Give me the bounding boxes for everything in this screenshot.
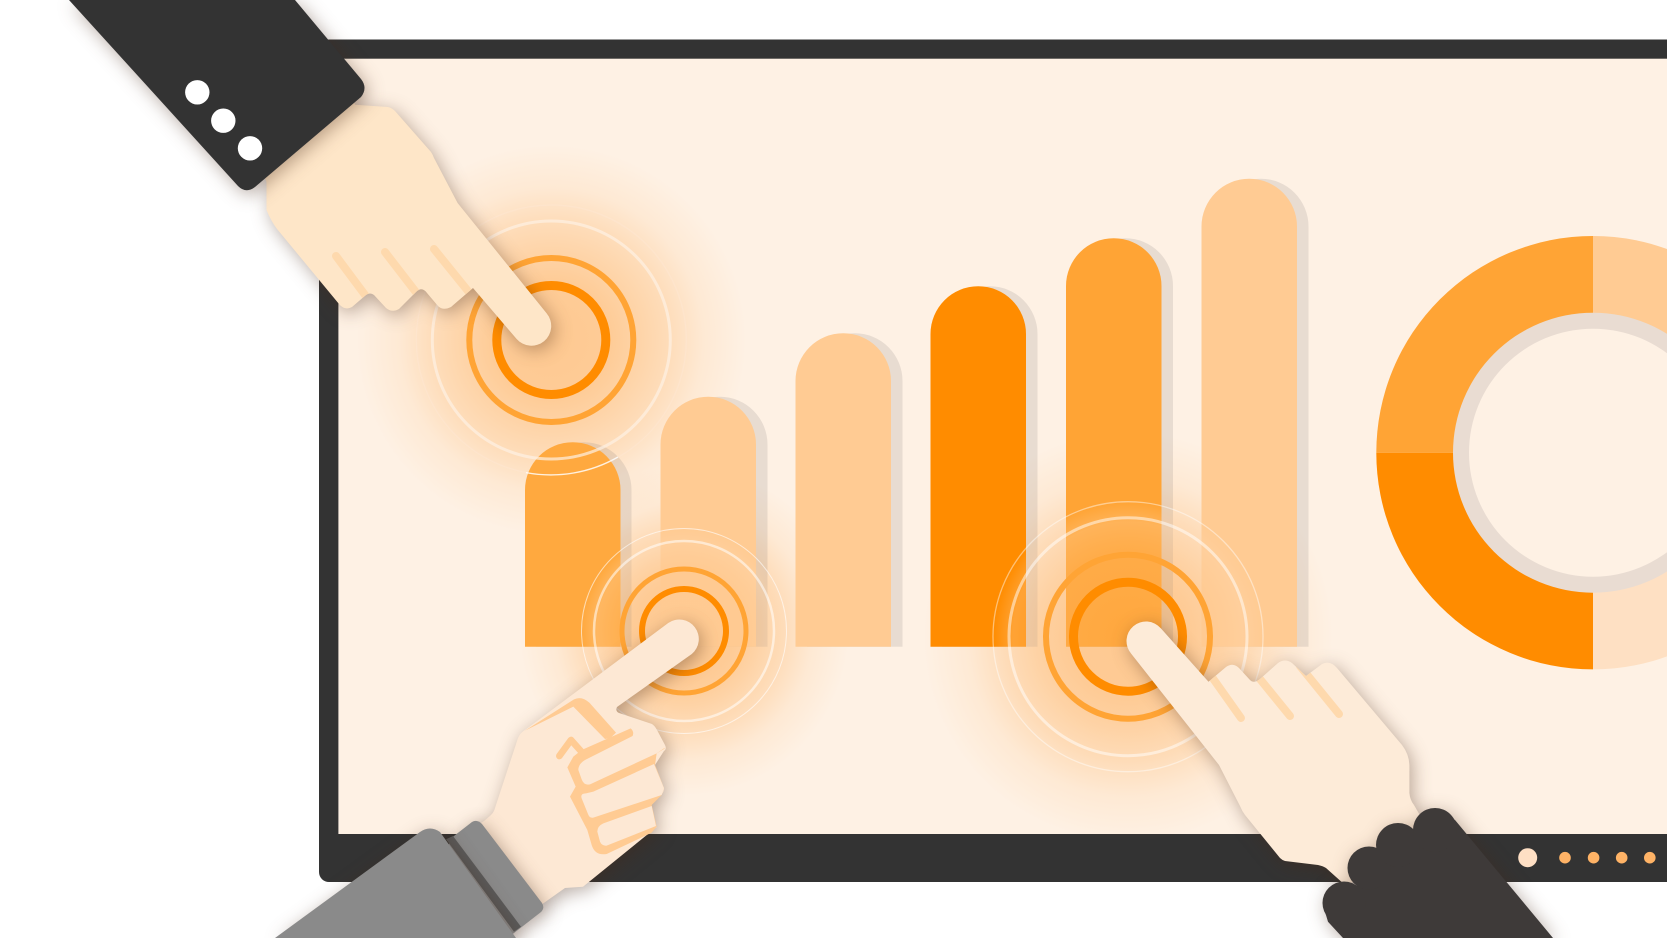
index finger outline [525, 698, 616, 739]
thumb hook [559, 740, 582, 756]
bar 1 [525, 442, 632, 647]
knuckle lines [336, 249, 472, 307]
hand top left [262, 92, 551, 346]
bar 5 [1066, 238, 1173, 647]
cuff [440, 821, 543, 938]
touch ripple top left [416, 205, 686, 475]
hand bottom left [470, 620, 699, 905]
arm [275, 828, 516, 938]
cuff ruffle 4 [1413, 808, 1457, 852]
knuckle lines [1207, 666, 1339, 718]
touch ripple bottom centre [582, 528, 786, 734]
finger outline block [567, 728, 665, 854]
bar 3 [796, 333, 902, 647]
cuff ruffle 2 [1348, 846, 1390, 890]
cuff ruffle 3 [1376, 823, 1420, 867]
touch ripple right [993, 502, 1263, 772]
bar 6 [1202, 179, 1308, 647]
hand shape [262, 92, 551, 346]
touch glows behind chart [356, 145, 1333, 842]
screen frame [319, 40, 1667, 882]
hand right [1126, 621, 1440, 885]
bar 2 [660, 397, 768, 647]
cuff [69, 0, 364, 190]
bar chart [525, 179, 1308, 647]
cuff buttons [185, 80, 262, 160]
sleeve top left [69, 0, 364, 190]
cuff ruffle 1 [1322, 882, 1366, 924]
finger 1 [578, 733, 665, 785]
sleeve bottom left [275, 821, 543, 938]
sleeve right [1322, 808, 1553, 938]
finger 3 [597, 806, 656, 846]
finger 2 [581, 764, 664, 818]
hand shape [1126, 621, 1440, 885]
cuff stripe [446, 836, 521, 932]
cuff body [1323, 808, 1553, 938]
navigation dots [1518, 848, 1656, 867]
hand shape [470, 620, 699, 905]
bar 4 [930, 286, 1038, 647]
donut chart [1376, 236, 1667, 669]
clenched fingers [525, 698, 665, 854]
